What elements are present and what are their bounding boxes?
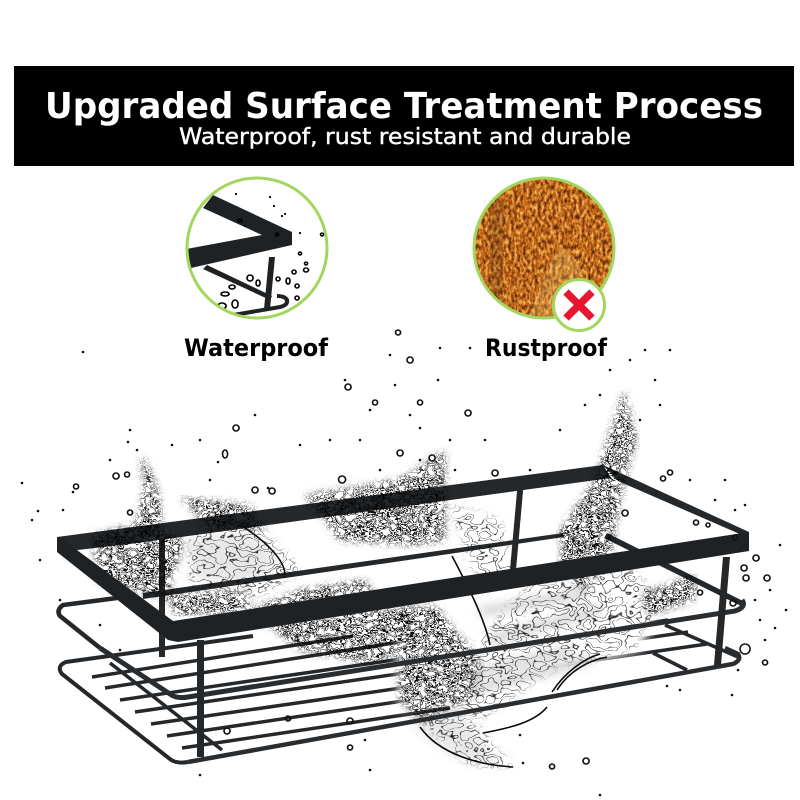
water splash: hand-drawn strands bbox=[240, 525, 607, 767]
lower front rail bbox=[188, 648, 739, 762]
water splash: white sheets over bars bbox=[395, 585, 655, 710]
subtitle: Waterproof, rust resistant and durable bbox=[179, 125, 631, 150]
water splash: grey sheet bands bbox=[465, 592, 600, 690]
water splash: squiggle texture bbox=[92, 390, 695, 768]
waterproof circle icon bbox=[186, 178, 327, 318]
rust circle icon bbox=[472, 176, 616, 330]
title: Upgraded Surface Treatment Process bbox=[45, 86, 763, 127]
shelf: back structure bbox=[57, 465, 749, 763]
label: rustproof: Rustproof bbox=[485, 334, 608, 362]
label: waterproof: Waterproof bbox=[184, 334, 329, 362]
water droplets bbox=[22, 330, 786, 795]
banner bbox=[14, 66, 794, 166]
shelf: front structure bbox=[57, 532, 749, 762]
red cross badge bbox=[554, 280, 604, 330]
top frame front band bbox=[57, 532, 749, 642]
water splash: translucent sheets bbox=[185, 530, 500, 765]
upper rail bbox=[100, 600, 743, 698]
front posts bbox=[197, 640, 204, 757]
